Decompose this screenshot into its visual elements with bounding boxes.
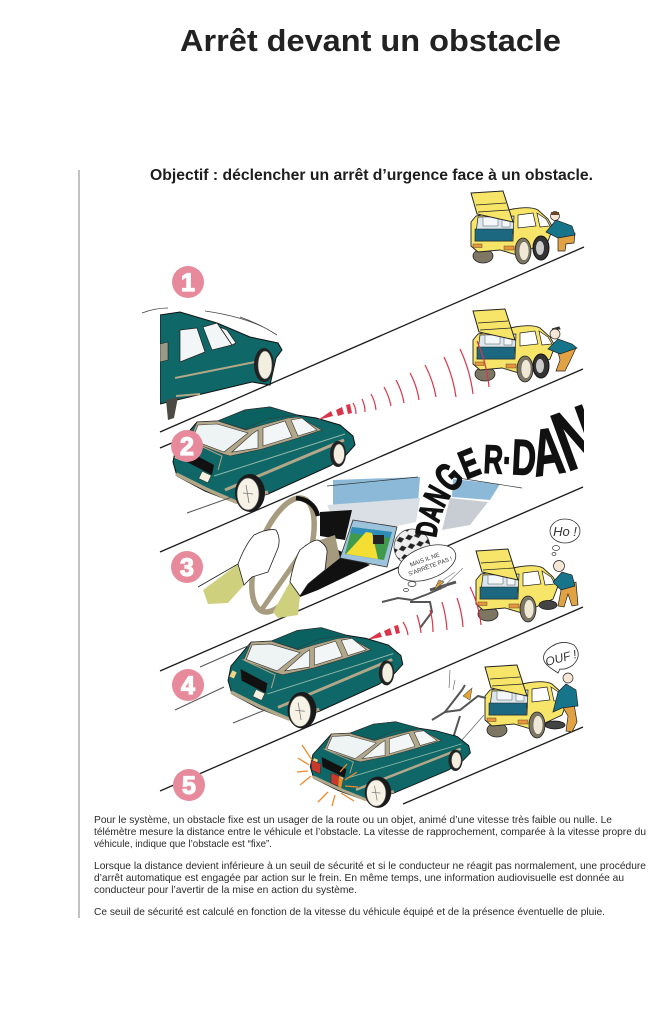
hands and sleeves (198, 530, 327, 618)
man standing and thought bubble Ho!: Ho ! (553, 524, 577, 539)
number 1 (172, 266, 204, 298)
number 4 (172, 669, 204, 701)
scene 2: car (173, 407, 355, 512)
left margin rule (78, 170, 80, 918)
man with tyre, scene 1 (533, 212, 575, 260)
DANGER warning lettering (415, 404, 584, 538)
brake lights and bursts (297, 745, 358, 806)
scene 5: obstacle yellow car (485, 665, 567, 738)
man with tyre, scene 2 (533, 327, 577, 378)
paragraph 2: conducteur pour l’avertir de la mise en action du système. (94, 885, 357, 896)
paragraph 2: d’arrêt automatique est engagée par action sur le frein. En même temps, une information audiovisuelle est donnée au (94, 873, 624, 884)
flying pedestrian figure, scene 3 (382, 568, 463, 628)
number 3 (171, 551, 203, 583)
paragraph 2: Lorsque la distance devient inférieure à un seuil de sécurité et si le conducteur ne réagit pas normalement, une procédure (94, 861, 646, 872)
objective heading: Objectif : déclencher un arrêt d’urgence face à un obstacle. (150, 167, 593, 184)
paragraph 3: Ce seuil de sécurité est calculé en fonction de la vitesse du véhicule équipé et de la présence éventuelle de pluie. (94, 907, 605, 918)
scene 4: car (228, 628, 403, 729)
flying pedestrian figure, scene 5 (432, 670, 486, 745)
paragraph 1 (94, 815, 646, 850)
man standing and thought bubble Ho! (539, 519, 580, 610)
scene 1: obstacle yellow car (471, 191, 553, 264)
paragraph 2 (94, 861, 646, 896)
scene 3: dashboard (300, 477, 522, 597)
road lines (160, 247, 584, 804)
number 3: 3 (180, 554, 194, 582)
scene 3: obstacle yellow car (476, 549, 558, 622)
speed line scene 2 (187, 497, 232, 513)
scene 2: obstacle yellow car (473, 309, 555, 382)
number 5 (173, 769, 205, 801)
man standing and bubble OUF!: OUF ! (544, 647, 579, 669)
number 4: 4 (181, 672, 195, 700)
scene 1: approaching car, cropped at left (142, 308, 282, 420)
radar waves scene 4 (367, 587, 481, 640)
number 2: 2 (180, 433, 194, 461)
paragraph 1: véhicule, indique que l’obstacle est “fixe”. (94, 839, 272, 850)
man standing and bubble OUF! (543, 642, 579, 732)
steering wheel (239, 490, 327, 620)
number 1: 1 (181, 269, 195, 297)
speech bubble: driver's thought: MAIS IL NE (409, 552, 441, 569)
speech bubble: driver's thought: S'ARRÊTE PAS ! (407, 554, 454, 578)
title: Arrêt devant un obstacle (180, 23, 561, 58)
paragraph 1: télémètre mesure la distance entre le véhicule et l’obstacle. La vitesse de rapprochement, comparée à la vitesse propre du (94, 827, 646, 838)
dashboard screen (340, 520, 397, 567)
number 2 (171, 430, 203, 462)
number 5: 5 (182, 772, 196, 800)
radar waves scene 2 (318, 341, 489, 420)
speaker grille (394, 529, 430, 565)
DANGER warning lettering: DANGER·DAN (415, 404, 584, 538)
explanatory text (94, 815, 646, 918)
paragraph 1: Pour le système, un obstacle fixe est un usager de la route ou un objet, animé d’une vitesse très faible ou nulle. Le (94, 815, 612, 826)
speed lines scene 4 (175, 645, 265, 723)
scene 5: braking car (310, 722, 470, 808)
speech bubble: driver's thought (393, 538, 461, 592)
